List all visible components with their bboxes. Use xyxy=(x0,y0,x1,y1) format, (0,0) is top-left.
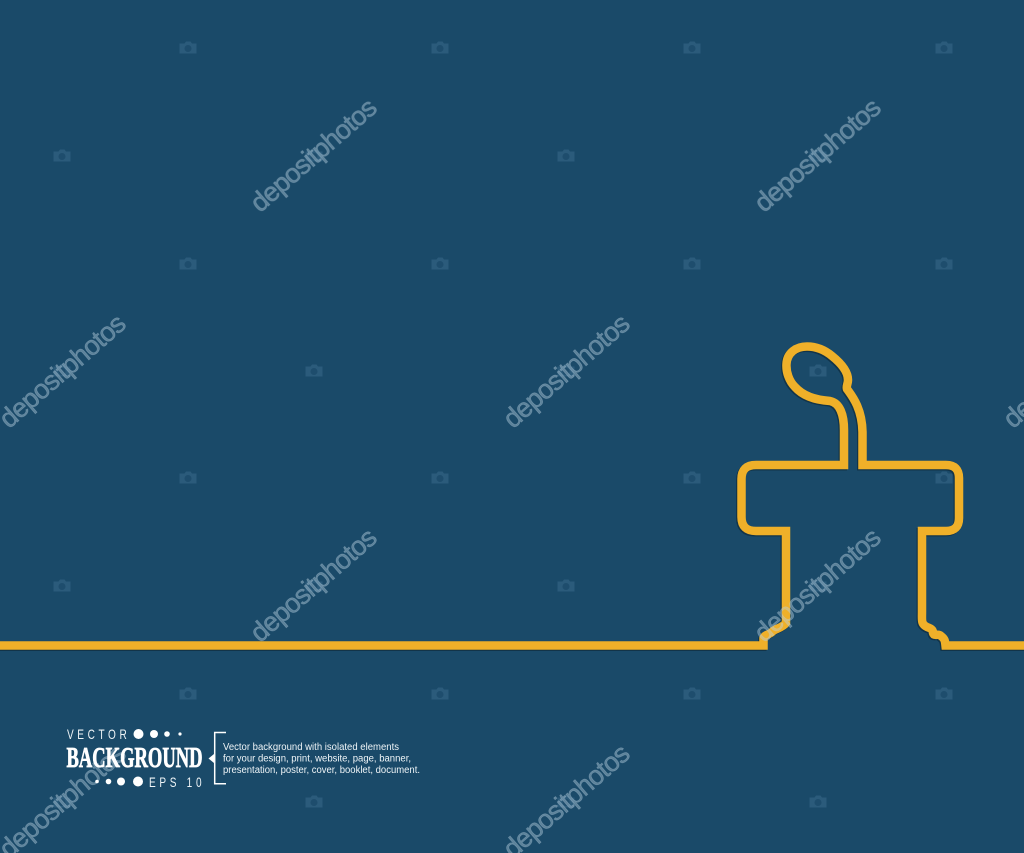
podium line: dark shadow xyxy=(0,348,1024,647)
podium line with microphone xyxy=(0,346,1024,646)
label: EPS 10: EPS 10 xyxy=(149,774,202,790)
watermark: depositphotos text: depositphotos xyxy=(748,522,886,648)
description text: presentation, poster, cover, booklet, document. xyxy=(223,765,420,776)
watermark: camera icons xyxy=(54,42,952,808)
label: BACKGROUND: BACKGROUND xyxy=(66,743,202,774)
description text xyxy=(223,742,420,776)
label: VECTOR: VECTOR xyxy=(67,726,127,742)
bottom dots xyxy=(95,776,143,786)
top dots xyxy=(134,729,182,739)
logo block: vector background eps 10 xyxy=(66,726,202,790)
bracket with pointer xyxy=(208,732,226,784)
watermark: depositphotos text: depositphotos xyxy=(244,92,382,218)
watermark: depositphotos text: depositphotos xyxy=(497,308,635,434)
watermark: depositphotos text: depositphotos xyxy=(748,92,886,218)
description text: Vector background with isolated elements xyxy=(223,742,399,753)
description text: for your design, print, website, page, banner, xyxy=(223,754,411,764)
watermark: depositphotos text: depositphotos xyxy=(244,522,382,648)
